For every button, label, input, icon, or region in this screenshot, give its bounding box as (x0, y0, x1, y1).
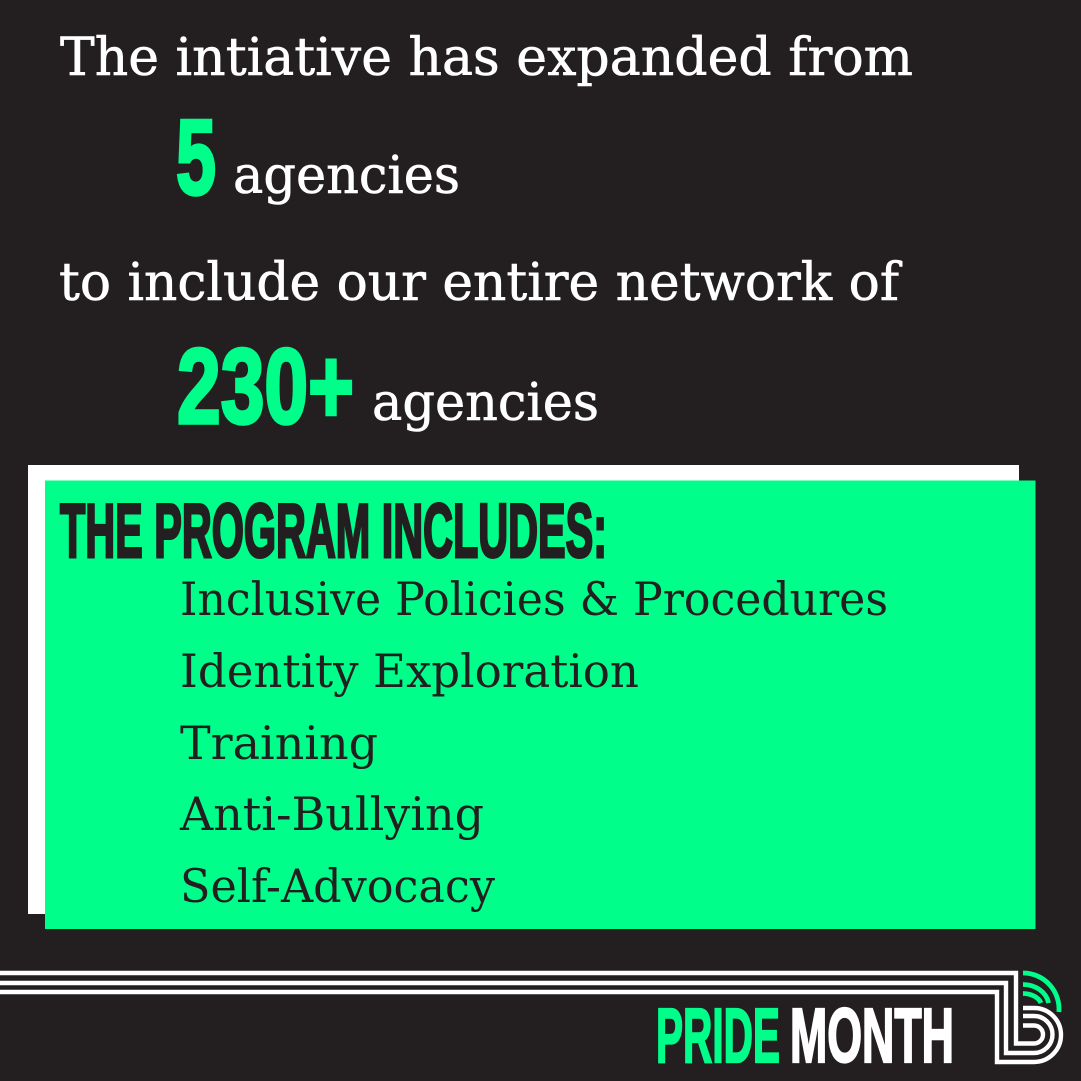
program list: Anti-Bullying (179, 787, 484, 841)
program list: Inclusive Policies & Procedures (180, 572, 888, 626)
intro text: entire network: to include our entire network of (59, 253, 903, 313)
panel heading: THE PROGRAM INCLUDES: (60, 489, 607, 574)
footer label: pride month: PRIDE (656, 993, 780, 1079)
stat: 5 agencies: agencies (233, 146, 460, 206)
footer label: pride month: MONTH (790, 993, 954, 1079)
stat: 230+ agencies: 230+ (177, 326, 354, 446)
panel offset white backing (28, 465, 1019, 914)
program list: Training (180, 716, 378, 770)
panel: program includes (28, 465, 1036, 929)
stat: 5 agencies (176, 97, 460, 217)
intro text: expanded from: The intiative has expanded from (60, 28, 913, 88)
program list: Self-Advocacy (180, 859, 495, 913)
stat: 230+ agencies: agencies (372, 373, 599, 433)
panel green card (45, 480, 1036, 929)
program list (179, 572, 888, 913)
program list: Identity Exploration (180, 644, 639, 698)
stat: 230+ agencies (177, 326, 599, 446)
icon: striped B logo (0, 973, 1061, 1062)
stat: 5 agencies: 5 (176, 97, 216, 217)
